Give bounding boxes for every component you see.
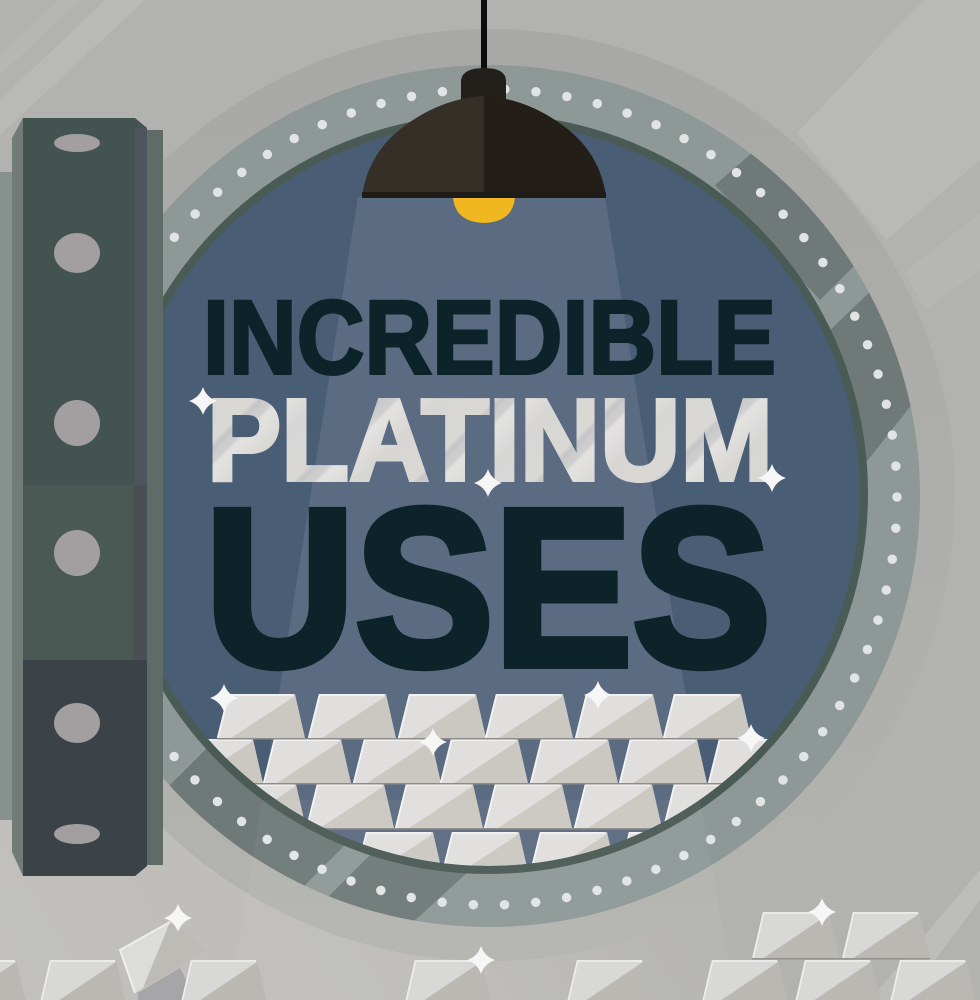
row 2 [208, 739, 768, 784]
light beam [268, 197, 686, 864]
lamp shade right [484, 96, 606, 197]
lamp shade bottom edge [362, 192, 606, 198]
lamp shade left [362, 96, 484, 197]
vault interior [163, 131, 860, 866]
lamp cord [481, 0, 487, 72]
ring dark segments [170, 154, 910, 920]
vault door ring [163, 65, 920, 927]
vault door hinge [0, 118, 163, 876]
floor bars [0, 912, 977, 1000]
title [203, 280, 776, 713]
hinge holes [54, 134, 100, 844]
row 4 [362, 832, 643, 866]
fallen bar shadow [138, 968, 196, 1000]
title line: platinum: PLATINUM [207, 375, 773, 505]
interior rim [112, 118, 864, 870]
stacked platinum bars [208, 694, 768, 866]
row 1 [217, 694, 753, 740]
ring rivets [81, 89, 897, 905]
title line: incredible: INCREDIBLE [203, 280, 776, 396]
title line: uses: USES [205, 463, 771, 713]
lamp bulb [453, 197, 515, 223]
stack shelf line [752, 958, 930, 960]
lamp cap [461, 68, 506, 100]
fallen tilted bar [120, 922, 207, 993]
row 3 [255, 784, 721, 830]
hanging lamp [362, 0, 606, 223]
sparkles [164, 387, 836, 974]
faint light beam outside vault [230, 800, 735, 1000]
